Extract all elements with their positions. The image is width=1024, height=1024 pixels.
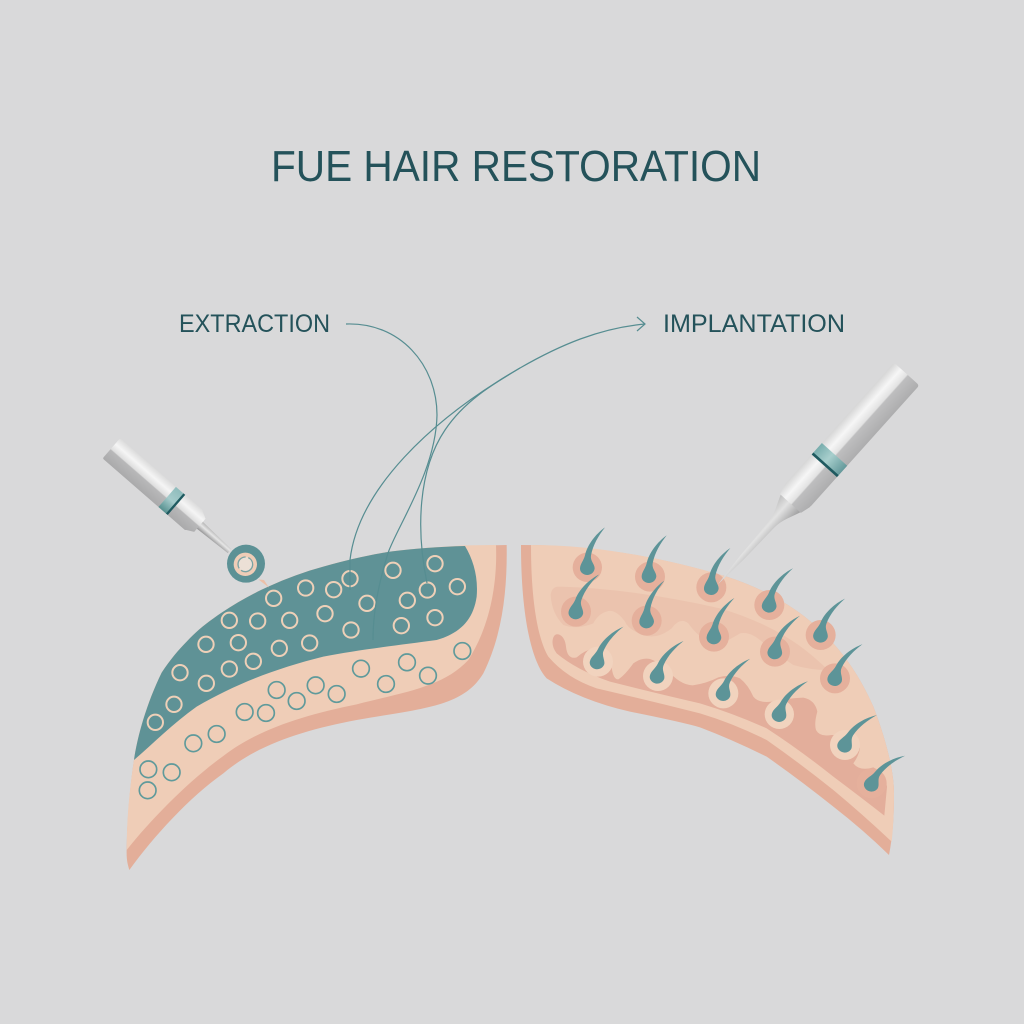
thread: third hair — [421, 368, 520, 583]
teal-ringed sites in peach zone — [139, 643, 471, 799]
label: implantation: IMPLANTATION — [663, 310, 845, 338]
title: FUE HAIR RESTORATION — [271, 142, 761, 191]
icon: extraction punch tool — [103, 438, 269, 588]
label: extraction: EXTRACTION — [179, 310, 330, 338]
thread: arrow to implantation — [350, 324, 645, 590]
peach-ringed sites in teal zone — [148, 556, 465, 730]
punch ring — [227, 545, 269, 588]
tool body — [103, 438, 238, 561]
panel: extraction scalp section — [127, 545, 507, 870]
follicle halos — [561, 553, 887, 798]
skin outer layer — [127, 545, 507, 870]
teal extraction zone — [134, 546, 477, 760]
dermal wavy band — [552, 634, 887, 816]
skin inner layer — [531, 545, 894, 842]
implanted hairs — [568, 527, 905, 799]
icon: implantation needle tool — [705, 363, 919, 596]
arrows: hair threads from extraction to implantation — [346, 317, 645, 640]
arrowhead — [637, 317, 645, 331]
thread: extraction label curve — [346, 324, 437, 640]
skin inner layer — [127, 545, 496, 850]
upper dermal tinted band — [551, 587, 828, 670]
panel: implantation scalp section — [521, 527, 905, 855]
skin outer layer — [521, 545, 894, 855]
healed follicle halos — [583, 647, 860, 760]
